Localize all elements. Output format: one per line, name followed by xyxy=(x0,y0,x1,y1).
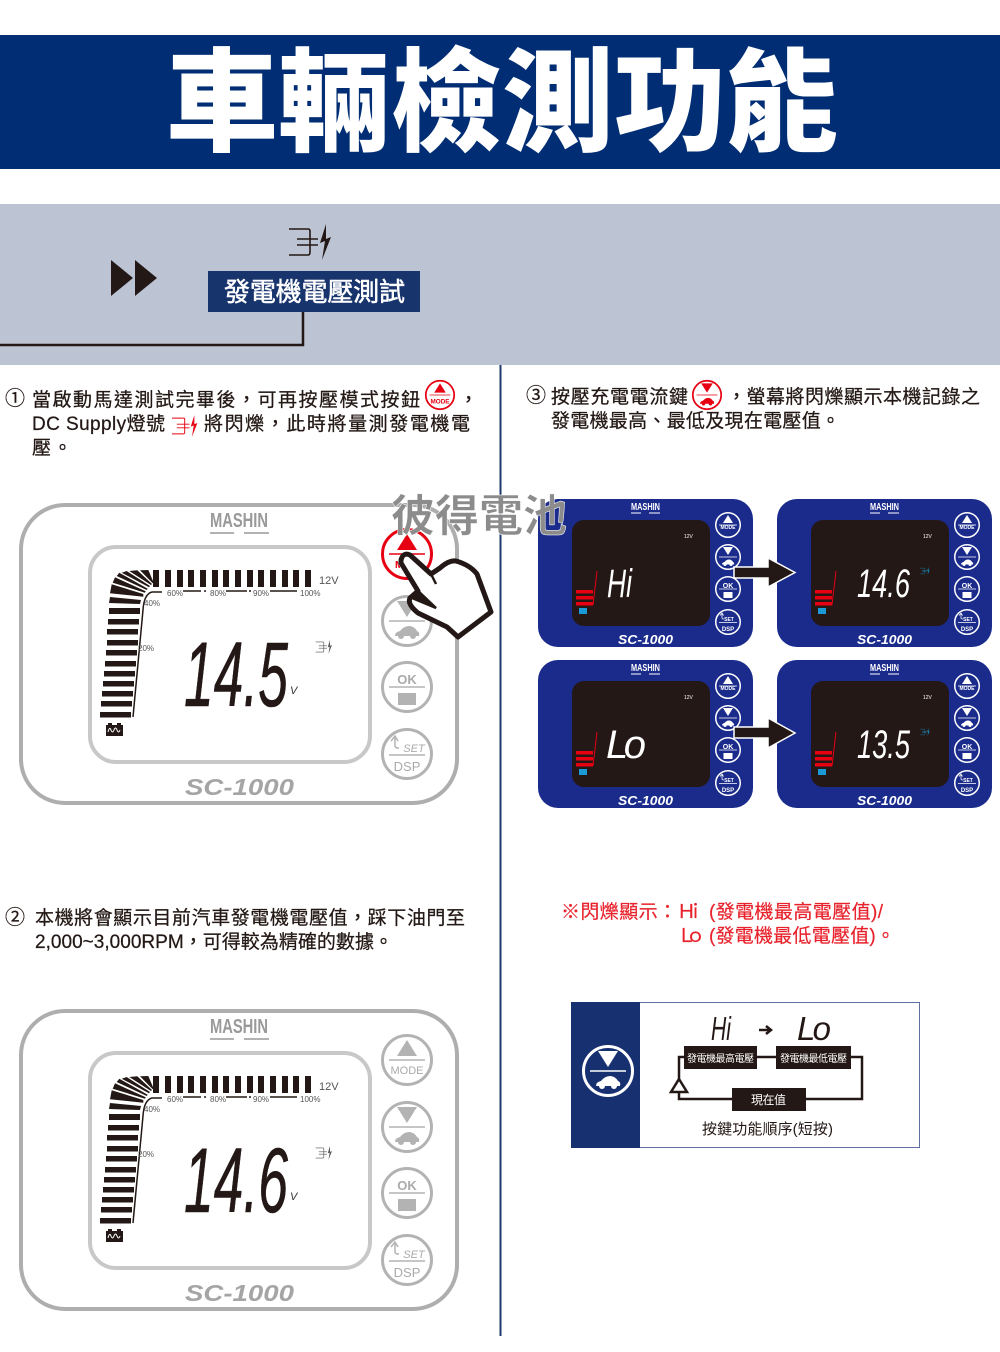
blinking note: Ｈｉ xyxy=(677,902,705,923)
panel: SC-1000 device reading 14.6: V xyxy=(290,1191,299,1203)
panel: blue device showing 14.6: DSP xyxy=(961,627,973,633)
panel: blue device showing 14.6: 12V xyxy=(923,534,933,540)
box: max voltage: 發電機最高電壓 xyxy=(687,1052,754,1065)
gauge labels xyxy=(138,1081,339,1159)
battery gauge xyxy=(100,1076,311,1242)
LCD screen xyxy=(90,547,370,762)
set button: DSP xyxy=(394,759,420,774)
panel: blue device showing 14.6: SC-1000 xyxy=(857,632,913,647)
set button: SET xyxy=(403,743,426,755)
icon: generator symbol xyxy=(289,224,331,260)
step 3 text: 發電機最高、最低及現在電壓值。 xyxy=(551,410,840,432)
reading Lo: Lo xyxy=(606,723,646,767)
panel: blue device showing 13.5: SC-1000 xyxy=(857,793,913,808)
panel: blue device showing Hi: SC-1000 xyxy=(618,632,674,647)
step 1 text xyxy=(5,381,478,459)
icon: charge button xyxy=(584,1046,632,1096)
icon: mode button inline xyxy=(426,381,454,409)
column divider xyxy=(500,365,502,1336)
step 3 text: 按壓充電電流鍵 xyxy=(551,386,688,408)
gauge labels: 100% xyxy=(300,589,320,598)
step 3 text xyxy=(526,381,980,432)
icon: pointing hand xyxy=(401,554,491,637)
box: max voltage xyxy=(684,1046,757,1069)
panel: blue device showing Lo: MASHIN xyxy=(631,663,660,674)
panel: blue device showing 14.6: OK xyxy=(962,583,972,590)
ok button xyxy=(382,662,432,712)
gauge labels: 80% xyxy=(210,1095,226,1104)
panel: blue device showing 14.6: MODE xyxy=(960,525,975,531)
ok button xyxy=(382,1168,432,1218)
panel: blue device showing Lo: SET xyxy=(724,778,734,784)
flow lines xyxy=(679,1057,862,1099)
step 2 text: 本機將會顯示目前汽車發電機電壓值，踩下油門至 xyxy=(35,907,465,929)
set button xyxy=(382,1236,432,1284)
panel: SC-1000 device reading 14.5 xyxy=(21,505,457,803)
panel: blue device showing Hi: DSP xyxy=(722,627,734,633)
gauge labels: 12V xyxy=(319,575,339,587)
icon: generator xyxy=(316,1146,332,1160)
arrow xyxy=(759,1026,771,1034)
charge button xyxy=(382,1102,432,1152)
panel: blue device showing 13.5: DSP xyxy=(961,788,973,794)
title banner: 車輛檢測功能 xyxy=(166,13,838,175)
step 1 text: 當啟動馬達測試完畢後，可再按壓模式按鈕 xyxy=(32,389,420,411)
step 2 text: ② xyxy=(5,906,25,929)
step 3 text: ③ xyxy=(526,384,546,407)
voltage reading: 14.5 xyxy=(184,624,288,726)
step 1 text: ① xyxy=(5,387,25,410)
panel: blue device showing Hi: SET xyxy=(724,617,734,623)
panel: blue device showing 14.6: SET xyxy=(963,617,973,623)
triangle marker xyxy=(671,1079,687,1092)
icon: generator xyxy=(316,640,332,654)
blinking note: ※閃爍顯示： xyxy=(561,901,677,923)
mode button red: M xyxy=(395,560,403,571)
gauge labels: 20% xyxy=(138,644,154,653)
reading Hi: Hi xyxy=(607,562,633,606)
gauge labels xyxy=(138,575,339,653)
gauge labels: 40% xyxy=(144,1105,160,1114)
gauge labels: 40% xyxy=(144,599,160,608)
step 1 text: 將閃爍，此時將量測發電機電 xyxy=(204,413,470,435)
mode button: MODE xyxy=(390,1065,424,1077)
panel: blue device showing 13.5: OK xyxy=(962,744,972,751)
ok button: OK xyxy=(397,1178,417,1193)
icon: double play arrows xyxy=(111,260,157,296)
panel: blue device showing Lo xyxy=(538,660,753,808)
watermark: 彼得電池 xyxy=(391,480,567,544)
icon: generator red inline xyxy=(172,415,197,437)
panel: blue device showing 13.5: 12V xyxy=(923,695,933,701)
section label: 發電機電壓測試 xyxy=(224,277,405,307)
Hi label: Hi xyxy=(711,1010,732,1047)
voltage reading: 14.6 xyxy=(184,1130,288,1232)
title banner xyxy=(0,13,1000,175)
step 1 text: ， xyxy=(459,390,478,411)
section label xyxy=(208,271,420,312)
set button: DSP xyxy=(394,1265,420,1280)
reading 13.5: 13.5 xyxy=(857,723,911,767)
box: current value xyxy=(732,1088,806,1111)
panel: blue device showing Lo: 12V xyxy=(684,695,694,701)
step 1 text: DC Supply燈號 xyxy=(32,413,165,435)
blinking note: (發電機最低電壓值)。 xyxy=(709,925,895,947)
panel: blue device showing 14.6: MASHIN xyxy=(870,502,899,513)
gauge labels: 60% xyxy=(167,1095,183,1104)
blinking note: (發電機最高電壓值)/ xyxy=(709,901,884,923)
panel: blue device showing Lo: OK xyxy=(723,744,733,751)
gauge labels: 20% xyxy=(138,1150,154,1159)
mode button xyxy=(382,1036,432,1084)
ok button: OK xyxy=(397,672,417,687)
panel: blue device showing Hi: OK xyxy=(723,583,733,590)
box: min voltage xyxy=(776,1046,851,1069)
box: min voltage: 發電機最低電壓 xyxy=(780,1052,847,1065)
panel: blue device showing 13.5: MASHIN xyxy=(870,663,899,674)
panel: SC-1000 device reading 14.5: V xyxy=(290,685,299,697)
step 3 text: ，螢幕將閃爍顯示本機記錄之 xyxy=(727,386,980,408)
blinking note xyxy=(561,901,895,947)
arrow: Lo to 13.5 xyxy=(734,718,795,748)
model name: SC-1000 xyxy=(185,1280,294,1306)
device brand: MASHIN xyxy=(210,1016,268,1038)
Lo label: Lo xyxy=(797,1010,831,1047)
panel: blue device showing 13.5: MODE xyxy=(960,686,975,692)
step 2 text xyxy=(5,906,465,953)
step 2 text: 2,000~3,000RPM，可得較為精確的數據。 xyxy=(35,931,393,953)
panel: blue device showing Hi: MASHIN xyxy=(631,502,660,513)
gauge labels: 90% xyxy=(253,589,269,598)
section header band xyxy=(0,204,1000,365)
blinking note: Ｌｏ xyxy=(677,926,705,947)
reading 14.6: 14.6 xyxy=(857,562,911,606)
panel: blue device showing Lo: SC-1000 xyxy=(618,793,674,808)
panel: blue device showing Hi: MODE xyxy=(720,525,736,531)
panel: blue device showing 14.6 xyxy=(777,499,992,647)
panel: blue device showing Lo: DSP xyxy=(722,788,734,794)
device brand: MASHIN xyxy=(210,510,268,532)
arrow: Hi to 14.6 xyxy=(734,558,795,587)
panel: blue device showing 13.5: SET xyxy=(963,778,973,784)
gauge labels: 80% xyxy=(210,589,226,598)
panel: blue device showing Hi: 12V xyxy=(684,534,694,540)
panel: blue device showing 13.5 xyxy=(777,660,992,808)
mode button red xyxy=(382,530,432,578)
icon: mode button inline: MODE xyxy=(430,399,450,406)
LCD screen xyxy=(90,1053,370,1268)
battery gauge xyxy=(100,570,311,736)
panel: blue device showing Lo: MODE xyxy=(720,686,736,692)
panel: SC-1000 device reading 14.6 xyxy=(21,1011,457,1309)
step 1 text: 壓。 xyxy=(32,438,72,459)
gauge labels: 12V xyxy=(319,1081,339,1093)
gauge labels: 90% xyxy=(253,1095,269,1104)
caption: 按鍵功能順序(短按) xyxy=(702,1121,833,1138)
set button: SET xyxy=(403,1249,426,1261)
model name: SC-1000 xyxy=(185,774,294,800)
connector line xyxy=(0,312,303,345)
panel: blue device showing Hi xyxy=(538,499,753,647)
set button xyxy=(382,730,432,778)
box: current value: 現在值 xyxy=(751,1092,786,1107)
panel: button function sequence xyxy=(571,1002,920,1148)
gauge labels: 60% xyxy=(167,589,183,598)
icon: charging current button inline xyxy=(693,381,721,409)
charge button xyxy=(382,596,432,646)
gauge labels: 100% xyxy=(300,1095,320,1104)
